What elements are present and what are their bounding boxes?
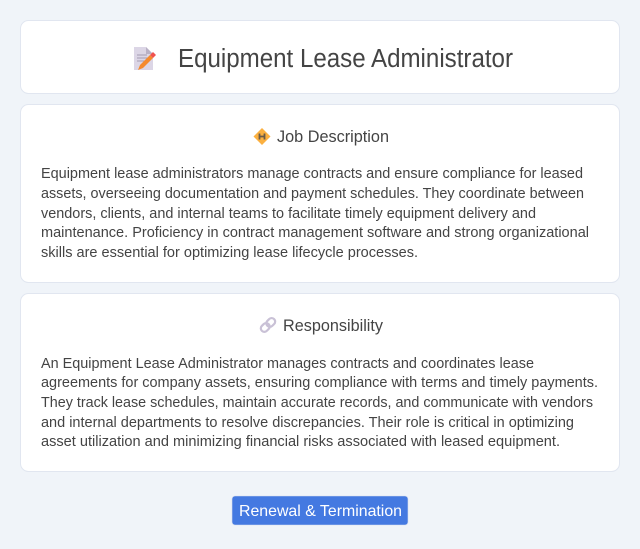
icon: chain link [259,317,277,333]
job description text: assets, overseeing documentation and payment schedules. They coordinate between [41,186,584,202]
icon: document with pencil [134,47,156,70]
button: renewal and termination: Renewal & Termination [239,503,402,520]
responsibility text: agreements for company assets, ensuring compliance with terms and timely payments. [41,375,598,391]
job description text [41,166,589,261]
responsibility text: and internal departments to resolve discrepancies. Their role is critical in optimizing [41,415,574,431]
panel: responsibility [20,294,620,472]
responsibility text: asset utilization and minimizing financial risks associated with leased equipment. [41,434,560,450]
job description text: maintenance. Proficiency in contract management software and strong organizational [41,225,589,241]
panel: job description [20,104,620,282]
responsibility text: An Equipment Lease Administrator manages contracts and coordinates lease [41,356,534,372]
job description text: Equipment lease administrators manage contracts and ensure compliance for leased [41,166,583,182]
job description text: skills are essential for optimizing lease lifecycle processes. [41,245,418,261]
responsibility text: They track lease schedules, maintain accurate records, and communicate with vendors [41,395,593,411]
icon: diamond sign [254,128,270,145]
title text: Equipment Lease Administrator [178,45,513,73]
responsibility text [41,356,598,450]
heading: responsibility: Responsibility [283,317,384,335]
button: renewal and termination [232,496,408,525]
heading: job description: Job Description [277,128,389,146]
job description text: vendors, clients, and internal teams to facilitate timely equipment delivery and [41,206,536,222]
panel: title [20,20,620,94]
